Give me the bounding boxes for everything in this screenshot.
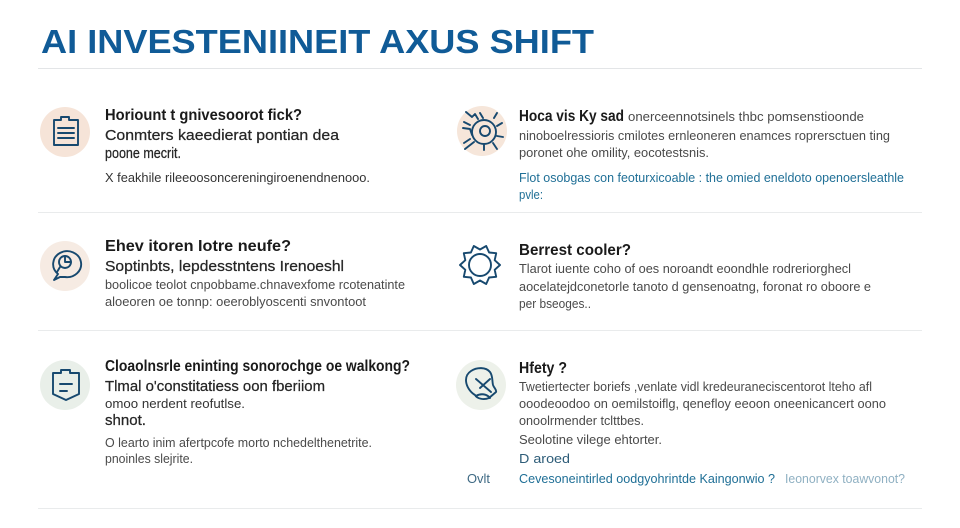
callout: bottom right question: Cevesoneintirled oodgyohrintde Kaingonwio ? bbox=[519, 471, 775, 486]
callout: top right: pvle: bbox=[519, 187, 543, 202]
text: middle left body bbox=[105, 278, 405, 309]
callout: faded question: Ieonorvex toawvonot? bbox=[785, 471, 905, 486]
subheading: top left: Conmters kaeedierat pontian dea bbox=[105, 127, 340, 144]
label: side note: Ovlt bbox=[467, 471, 490, 486]
subheading: bottom left: shnot. bbox=[105, 412, 146, 429]
subheading: top left: poone mecrit. bbox=[105, 145, 181, 162]
panel: bottom left bbox=[40, 358, 410, 466]
text: top right body: onerceennotsinels thbc pomsenstioonde bbox=[628, 110, 864, 124]
text: bottom right body: Seolotine vilege ehtorter. bbox=[519, 433, 662, 447]
subheading: middle left: Soptinbts, lepdesstntens Irenoeshl bbox=[105, 258, 344, 275]
text: top right body: poronet ohe omility, eocotestsnis. bbox=[519, 146, 709, 160]
icon: gear with sparks bbox=[457, 106, 507, 156]
text: top left note: X feakhile rileeoosoncereningiroenendnenooo. bbox=[105, 170, 370, 185]
panel: middle right bbox=[460, 242, 871, 311]
text: middle right body: per bseoges.. bbox=[519, 297, 591, 311]
subheading: bottom left bbox=[105, 378, 325, 429]
text: top right body: ninoboelressioris cmilotes ernleoneren enamces roprersctuen ting bbox=[519, 129, 890, 143]
text: middle left body: aloeoren oe tonnp: oeeroblyoscenti snvontoot bbox=[105, 295, 367, 309]
panel: middle left bbox=[40, 238, 405, 309]
subheading: top left bbox=[105, 127, 340, 162]
subheading: bottom left: omoo nerdent reofutlse. bbox=[105, 396, 245, 411]
heading: bottom right: Hfety ? bbox=[519, 360, 567, 377]
text: bottom right body: Twetiertecter boriefs ,venlate vidl kredeuraneciscentorot lteho afl bbox=[519, 380, 872, 394]
heading: top left: Horiount t gnivesoorot fick? bbox=[105, 107, 302, 124]
text: bottom left body: pnoinles slejrite. bbox=[105, 452, 193, 466]
callout: top right bbox=[519, 170, 904, 202]
title: AI INVESTENIINEIT AXUS SHIFT bbox=[41, 24, 595, 61]
text: top right body bbox=[519, 108, 890, 160]
text: bottom right body: ooodeoodoo on oemilstoiflg, qenefloy eeoon oneenicancert oono bbox=[519, 397, 886, 411]
icon: gear bbox=[460, 246, 500, 284]
panel: bottom right bbox=[456, 360, 905, 486]
text: bottom right body: onoolrmender tclttbes. bbox=[519, 414, 644, 428]
heading: middle left: Ehev itoren Iotre neufe? bbox=[105, 238, 291, 255]
icon: clipboard bbox=[40, 107, 90, 157]
text: bottom left body bbox=[105, 436, 372, 466]
icon: speech magnifier bbox=[40, 241, 90, 291]
heading: bottom left: Cloaolnsrle eninting sonorochge oe walkong? bbox=[105, 358, 410, 375]
text: top right body: Hoca vis Ky sad bbox=[519, 108, 624, 125]
label: status: D aroed bbox=[519, 451, 570, 466]
text: bottom right body bbox=[519, 380, 886, 447]
icon: head profile bbox=[456, 360, 506, 410]
callout: top right: Flot osobgas con feoturxicoable : the omied eneldoto openoersleathle bbox=[519, 170, 904, 185]
text: middle right body: aocelatejdconetorle tanoto d gensenoatng, foronat ro oboore e bbox=[519, 280, 871, 294]
icon: shield clipboard bbox=[40, 360, 90, 410]
panel: top left bbox=[40, 107, 370, 185]
text: middle left body: boolicoe teolot cnpobbame.chnavexfome rcotenatinte bbox=[105, 278, 405, 292]
text: bottom left body: O learto inim afertpcofe morto nchedelthenetrite. bbox=[105, 436, 372, 450]
text: middle right body: Tlarot iuente coho of oes noroandt eoondhle rodreriorghecl bbox=[519, 262, 851, 276]
heading: middle right: Berrest cooler? bbox=[519, 242, 631, 259]
panel: top right bbox=[457, 106, 904, 202]
text: middle right body bbox=[519, 262, 871, 311]
subheading: bottom left: Tlmal o'constitatiess oon fberiiom bbox=[105, 378, 325, 395]
